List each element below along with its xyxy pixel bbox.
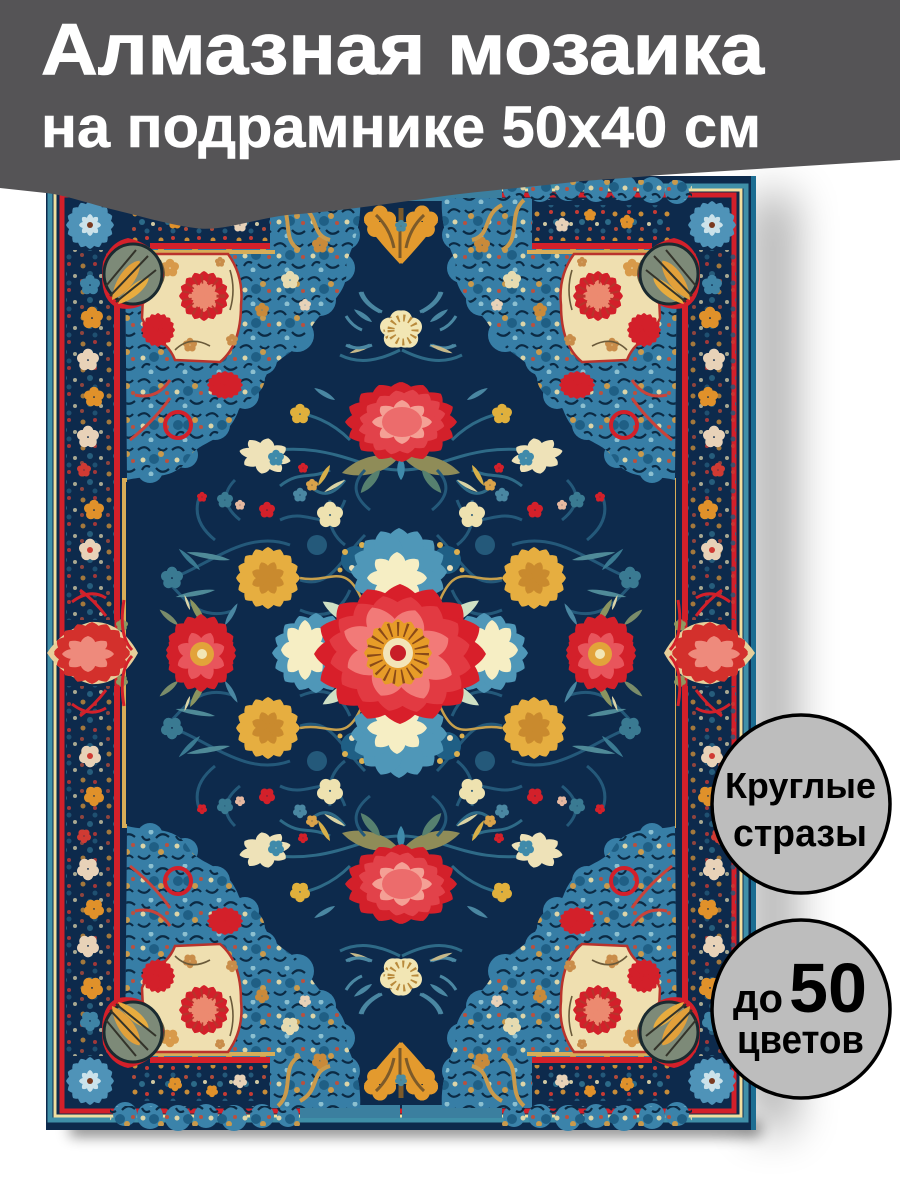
quadrant top-right (330, 175, 760, 697)
badge: round rhinestones (712, 715, 890, 893)
gold ring (354, 609, 442, 697)
title: Алмазная мозаика (41, 10, 765, 90)
canvas base (46, 176, 756, 1130)
canvas side edge (751, 176, 756, 1130)
quadrant bottom-right (330, 609, 760, 1131)
central flower (259, 515, 541, 791)
border frame (50, 186, 746, 1120)
subtitle: на подрамнике 50х40 см (41, 95, 761, 160)
pale diagonal petals (319, 595, 482, 711)
badge: up to 50 colours (712, 920, 890, 1098)
canvas: floral carpet diamond mosaic (42, 175, 760, 1131)
cream inner petals (281, 552, 518, 754)
cream ring (383, 638, 413, 668)
header banner (0, 0, 900, 229)
badge: up to 50 colours: цветов (737, 1018, 864, 1062)
badge: round rhinestones: Круглые (725, 765, 876, 806)
quadrant top-left (42, 175, 472, 697)
blue outer petals (259, 515, 541, 791)
badge: up to 50 colours: до (733, 977, 783, 1021)
badge: round rhinestones: стразы (733, 813, 867, 855)
canvas shadow (70, 195, 794, 1136)
flower core (390, 645, 406, 661)
red flower head (288, 563, 512, 745)
quadrant bottom-left (42, 609, 472, 1131)
field panel (127, 250, 675, 1056)
badge: up to 50 colours: 50 (789, 949, 867, 1027)
